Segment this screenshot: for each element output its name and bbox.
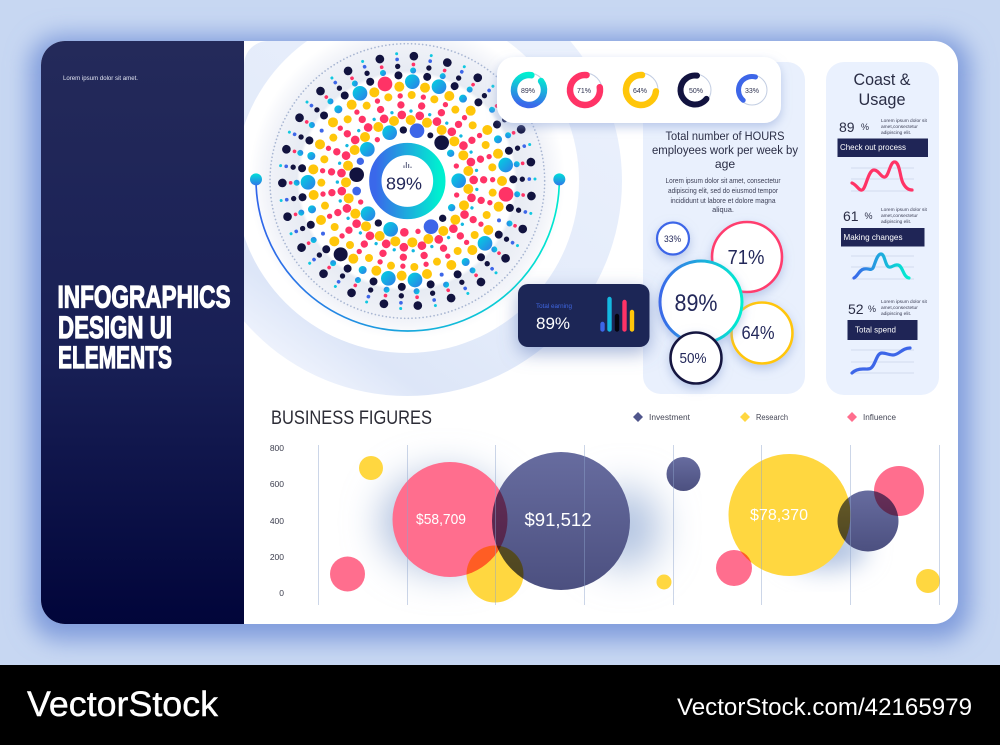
- business figures heading: BUSINESS FIGURES: [271, 408, 432, 429]
- bubble 71%: 71%: [728, 247, 765, 269]
- bubble chart: [270, 443, 940, 605]
- metric: making changes: 61: [843, 208, 859, 224]
- y axis labels: 0: [279, 588, 284, 598]
- gradient accent dots: [301, 74, 513, 287]
- bubble value labels: [416, 507, 808, 530]
- metric: check out process: amet,consectetur: [881, 124, 918, 130]
- radial dot chart: [250, 44, 565, 331]
- bubble 50%: 50%: [680, 351, 707, 367]
- sidebar title: [58, 278, 230, 375]
- sidebar title: ELEMENTS: [58, 339, 172, 375]
- total earning card: [518, 284, 650, 347]
- card glow: [30, 36, 970, 640]
- radial spokes type A: [278, 52, 536, 310]
- panel heading: [652, 129, 799, 171]
- panel background: [826, 62, 939, 395]
- y axis labels: 600: [270, 479, 284, 489]
- panel description: adipiscing elit, sed do eiusmod tempor: [668, 186, 778, 195]
- mini bar chart: [602, 299, 632, 330]
- bubble 64%: [732, 302, 792, 364]
- bubble value labels: $91,512: [524, 509, 592, 530]
- panel heading: Coast &: [854, 70, 911, 89]
- metric: making changes: [841, 207, 928, 278]
- metric: making changes: adipiscing elit.: [881, 219, 911, 225]
- donut value: 89%: [386, 174, 422, 194]
- donut 89%: 89%: [521, 88, 535, 95]
- arc end cap right: [553, 173, 565, 185]
- donut 71%: 71%: [577, 88, 591, 95]
- donut 89%: [512, 73, 546, 107]
- metric: check out process: Check out process: [840, 142, 906, 152]
- dotted ring: [270, 44, 545, 318]
- metric: check out process: [838, 118, 928, 190]
- donut 64%: 64%: [633, 88, 647, 95]
- footer logo: VectorStock: [27, 685, 219, 724]
- yellow dots: [308, 82, 507, 281]
- panel description: aliqua.: [712, 205, 734, 214]
- metric: making changes: Making changes: [844, 232, 902, 242]
- red accent dots: [358, 77, 513, 237]
- bubble 33%: [657, 222, 689, 254]
- panel background: [643, 62, 805, 394]
- footer image id: VectorStock.com/42165979: [677, 694, 972, 721]
- panel: total hours: [643, 62, 805, 394]
- bubble 33%: 33%: [664, 234, 681, 244]
- y axis labels: 200: [270, 552, 284, 562]
- metric: total spend: %: [868, 304, 876, 314]
- metric: total spend: Total spend: [855, 324, 896, 334]
- bubble 71%: [712, 222, 782, 292]
- y axis labels: [270, 443, 284, 598]
- metric: making changes: Lorem ipsum dolor sit: [881, 207, 928, 213]
- navy accent dots: [334, 126, 449, 261]
- sidebar title: DESIGN UI: [58, 309, 172, 345]
- metric: check out process: adipiscing elit.: [881, 130, 911, 136]
- bubble value labels: $78,370: [750, 507, 808, 524]
- panel description: [666, 176, 781, 214]
- metric: making changes: %: [864, 211, 873, 221]
- strip background: [497, 57, 781, 123]
- sidebar background: [41, 41, 244, 624]
- sidebar caption: Lorem ipsum dolor sit amet.: [63, 75, 138, 82]
- donut 71%: [568, 73, 602, 107]
- panel: coast and usage: [826, 62, 939, 395]
- legend: research: [740, 412, 788, 422]
- y axis labels: 800: [270, 443, 284, 453]
- footer bar: [0, 665, 1000, 745]
- radial spokes type B: [279, 52, 537, 310]
- donut 33%: 33%: [745, 88, 759, 95]
- bubble value labels: $58,709: [416, 511, 466, 528]
- blue accent dots: [320, 123, 501, 277]
- radial chart background discs: [244, 41, 622, 396]
- panel heading: employees work per week by: [652, 143, 799, 157]
- metric: check out process: 89: [839, 119, 855, 135]
- legend: influence: Influence: [863, 412, 896, 422]
- panel description: incididunt ut labore et dolore magna: [670, 196, 776, 205]
- card background: [518, 284, 650, 347]
- metric: total spend: [848, 299, 928, 373]
- donut 50%: [679, 74, 711, 106]
- panel description: Lorem ipsum dolor sit amet, consectetur: [666, 176, 781, 185]
- metric: check out process: %: [861, 122, 869, 132]
- donut 33%: [735, 73, 769, 107]
- arc end cap left: [250, 173, 262, 185]
- bubble glow shadows: [383, 474, 867, 570]
- sidebar panel: [41, 41, 244, 624]
- bubble 89%: 89%: [674, 290, 718, 317]
- panel heading: Usage: [858, 90, 906, 109]
- bubble 64%: 64%: [742, 323, 774, 343]
- donut bar icon: [404, 162, 411, 168]
- sidebar title: INFOGRAPHICS: [58, 278, 230, 314]
- metric: total spend: 52: [848, 301, 864, 317]
- metric: making changes: amet,consectetur: [881, 213, 918, 219]
- panel heading: Total number of HOURS: [666, 129, 784, 143]
- donut strip card: [497, 57, 781, 123]
- center donut: [375, 149, 439, 213]
- legend: investment: Investment: [649, 412, 691, 422]
- vertical grid lines: [318, 445, 940, 605]
- legend: research: Research: [756, 412, 788, 422]
- bubble 50%: [670, 332, 722, 384]
- legend: [633, 412, 896, 422]
- metric: total spend: Lorem ipsum dolor sit: [881, 299, 928, 305]
- legend: influence: [847, 412, 896, 422]
- metric: total spend: amet,consectetur: [881, 305, 918, 311]
- card value: 89%: [536, 314, 570, 333]
- main card: [41, 41, 958, 624]
- gridlines: [851, 168, 914, 373]
- card label: Total earning: [536, 303, 573, 310]
- progress arc: [250, 173, 565, 331]
- donut 64%: [624, 73, 658, 107]
- metric: total spend: adipiscing elit.: [881, 311, 911, 317]
- bubble 89%: [660, 261, 742, 343]
- y axis labels: 400: [270, 516, 284, 526]
- bubbles: [330, 452, 940, 602]
- panel heading: age: [715, 157, 735, 171]
- donut 50%: 50%: [689, 88, 703, 95]
- metric: check out process: Lorem ipsum dolor sit: [881, 118, 928, 124]
- panel heading: [854, 70, 911, 109]
